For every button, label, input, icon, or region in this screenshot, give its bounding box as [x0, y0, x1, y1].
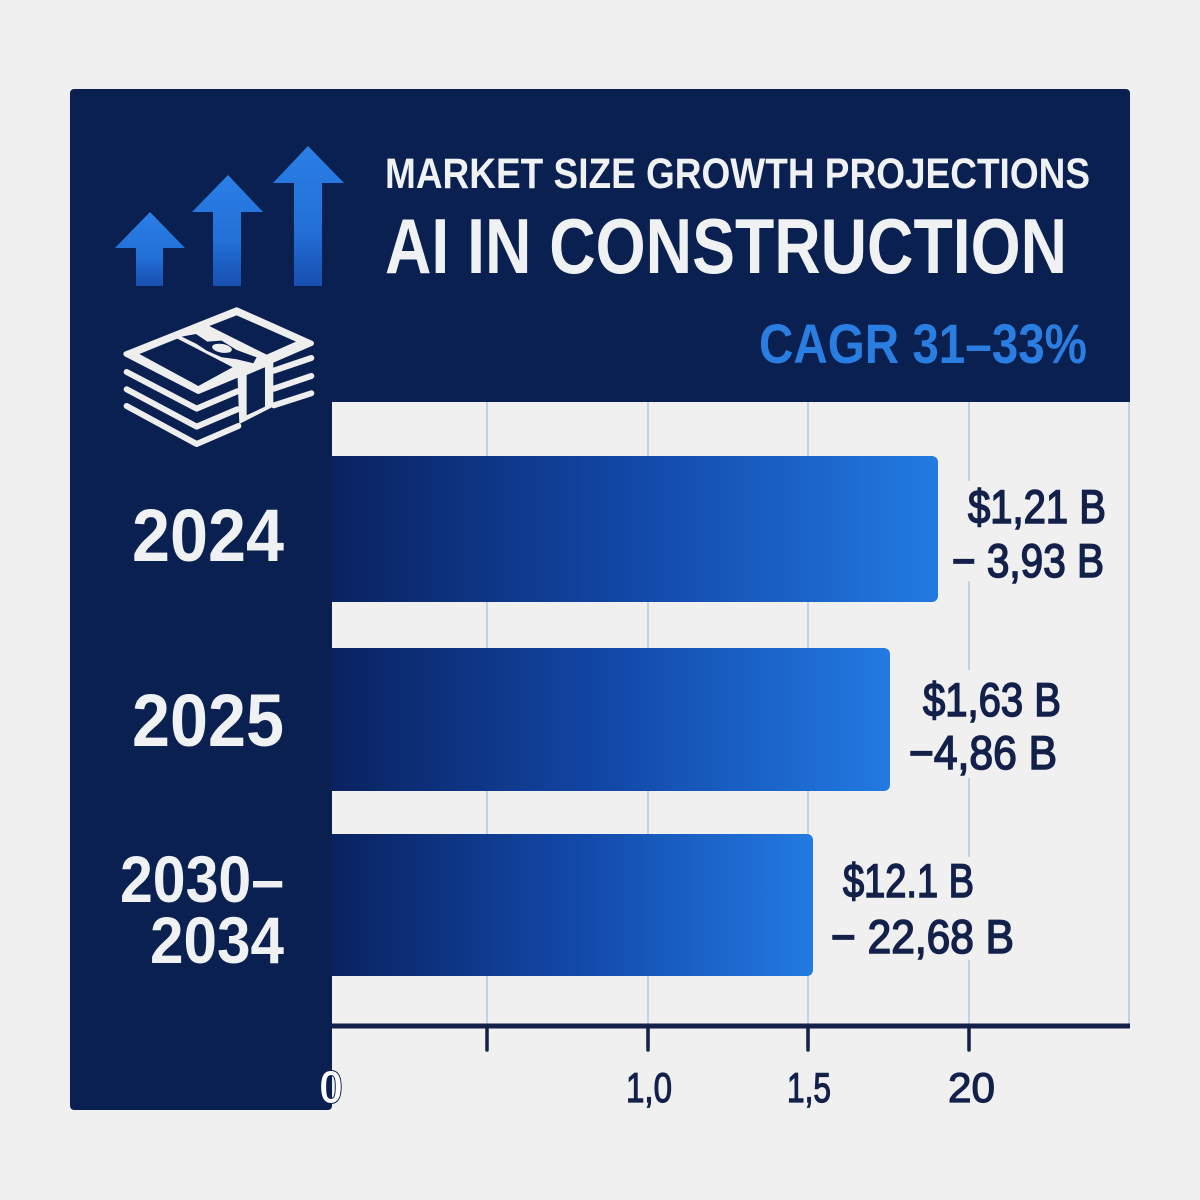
value label: 2024: − 3,93 B	[952, 534, 1104, 587]
panel: navy header and year sidebar	[70, 89, 1130, 1110]
year label: 2025: 2025	[132, 679, 284, 762]
icon: three rising arrows	[115, 146, 344, 286]
axis labels: 20	[948, 1064, 995, 1111]
bar: 2030-2034	[332, 834, 813, 976]
value label: 2024	[952, 480, 1106, 587]
value label: 2030-2034: $12.1 B	[843, 854, 974, 907]
chart plot background grid	[487, 402, 1129, 1026]
axis labels: 1,0	[626, 1064, 672, 1111]
title: market size growth projections: MARKET SIZE GROWTH PROJECTIONS	[385, 150, 1090, 198]
value label: 2024: $1,21 B	[968, 480, 1106, 533]
value label: 2030-2034: − 22,68 B	[831, 910, 1014, 963]
year label: 2030-2034: 2034	[150, 903, 284, 977]
year label: 2030-2034: 2030–	[120, 842, 284, 916]
value label: 2025: $1,63 B	[923, 673, 1061, 726]
year label: 2024: 2024	[132, 494, 284, 577]
bar: 2024	[332, 456, 938, 602]
x axis with ticks	[332, 1026, 1130, 1050]
axis labels: 0	[319, 1061, 343, 1113]
value label: 2025	[909, 673, 1061, 779]
icon: stack of money	[126, 310, 311, 444]
callout: CAGR range: CAGR 31–33%	[759, 312, 1087, 375]
axis labels: 1,5	[787, 1064, 831, 1111]
heading: AI in construction: AI IN CONSTRUCTION	[385, 202, 1067, 290]
year label: 2030-2034	[120, 842, 284, 977]
value label: 2030-2034	[831, 854, 1014, 963]
bar: 2025	[332, 648, 890, 791]
axis labels	[319, 1061, 995, 1113]
value label: 2025: −4,86 B	[909, 726, 1057, 779]
